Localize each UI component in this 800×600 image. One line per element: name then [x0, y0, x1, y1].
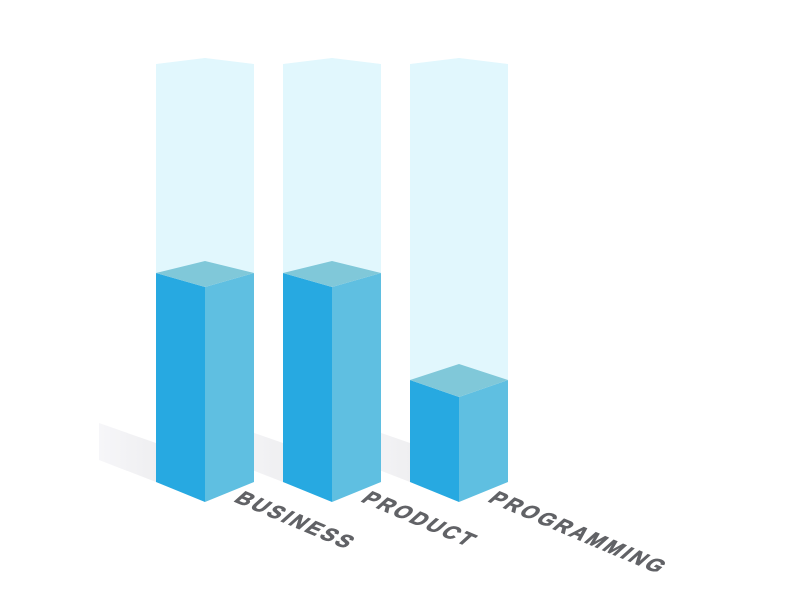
shadow: programming — [353, 423, 410, 482]
bar: programming — [410, 58, 508, 502]
bar: product — [283, 58, 381, 502]
label: business: BUSINESS — [229, 488, 362, 553]
label: product: PRODUCT — [356, 488, 483, 551]
shadow: business — [99, 423, 156, 482]
shadow: product — [226, 423, 283, 482]
bar: business — [156, 58, 254, 502]
label: programming: PROGRAMMING — [483, 488, 673, 578]
